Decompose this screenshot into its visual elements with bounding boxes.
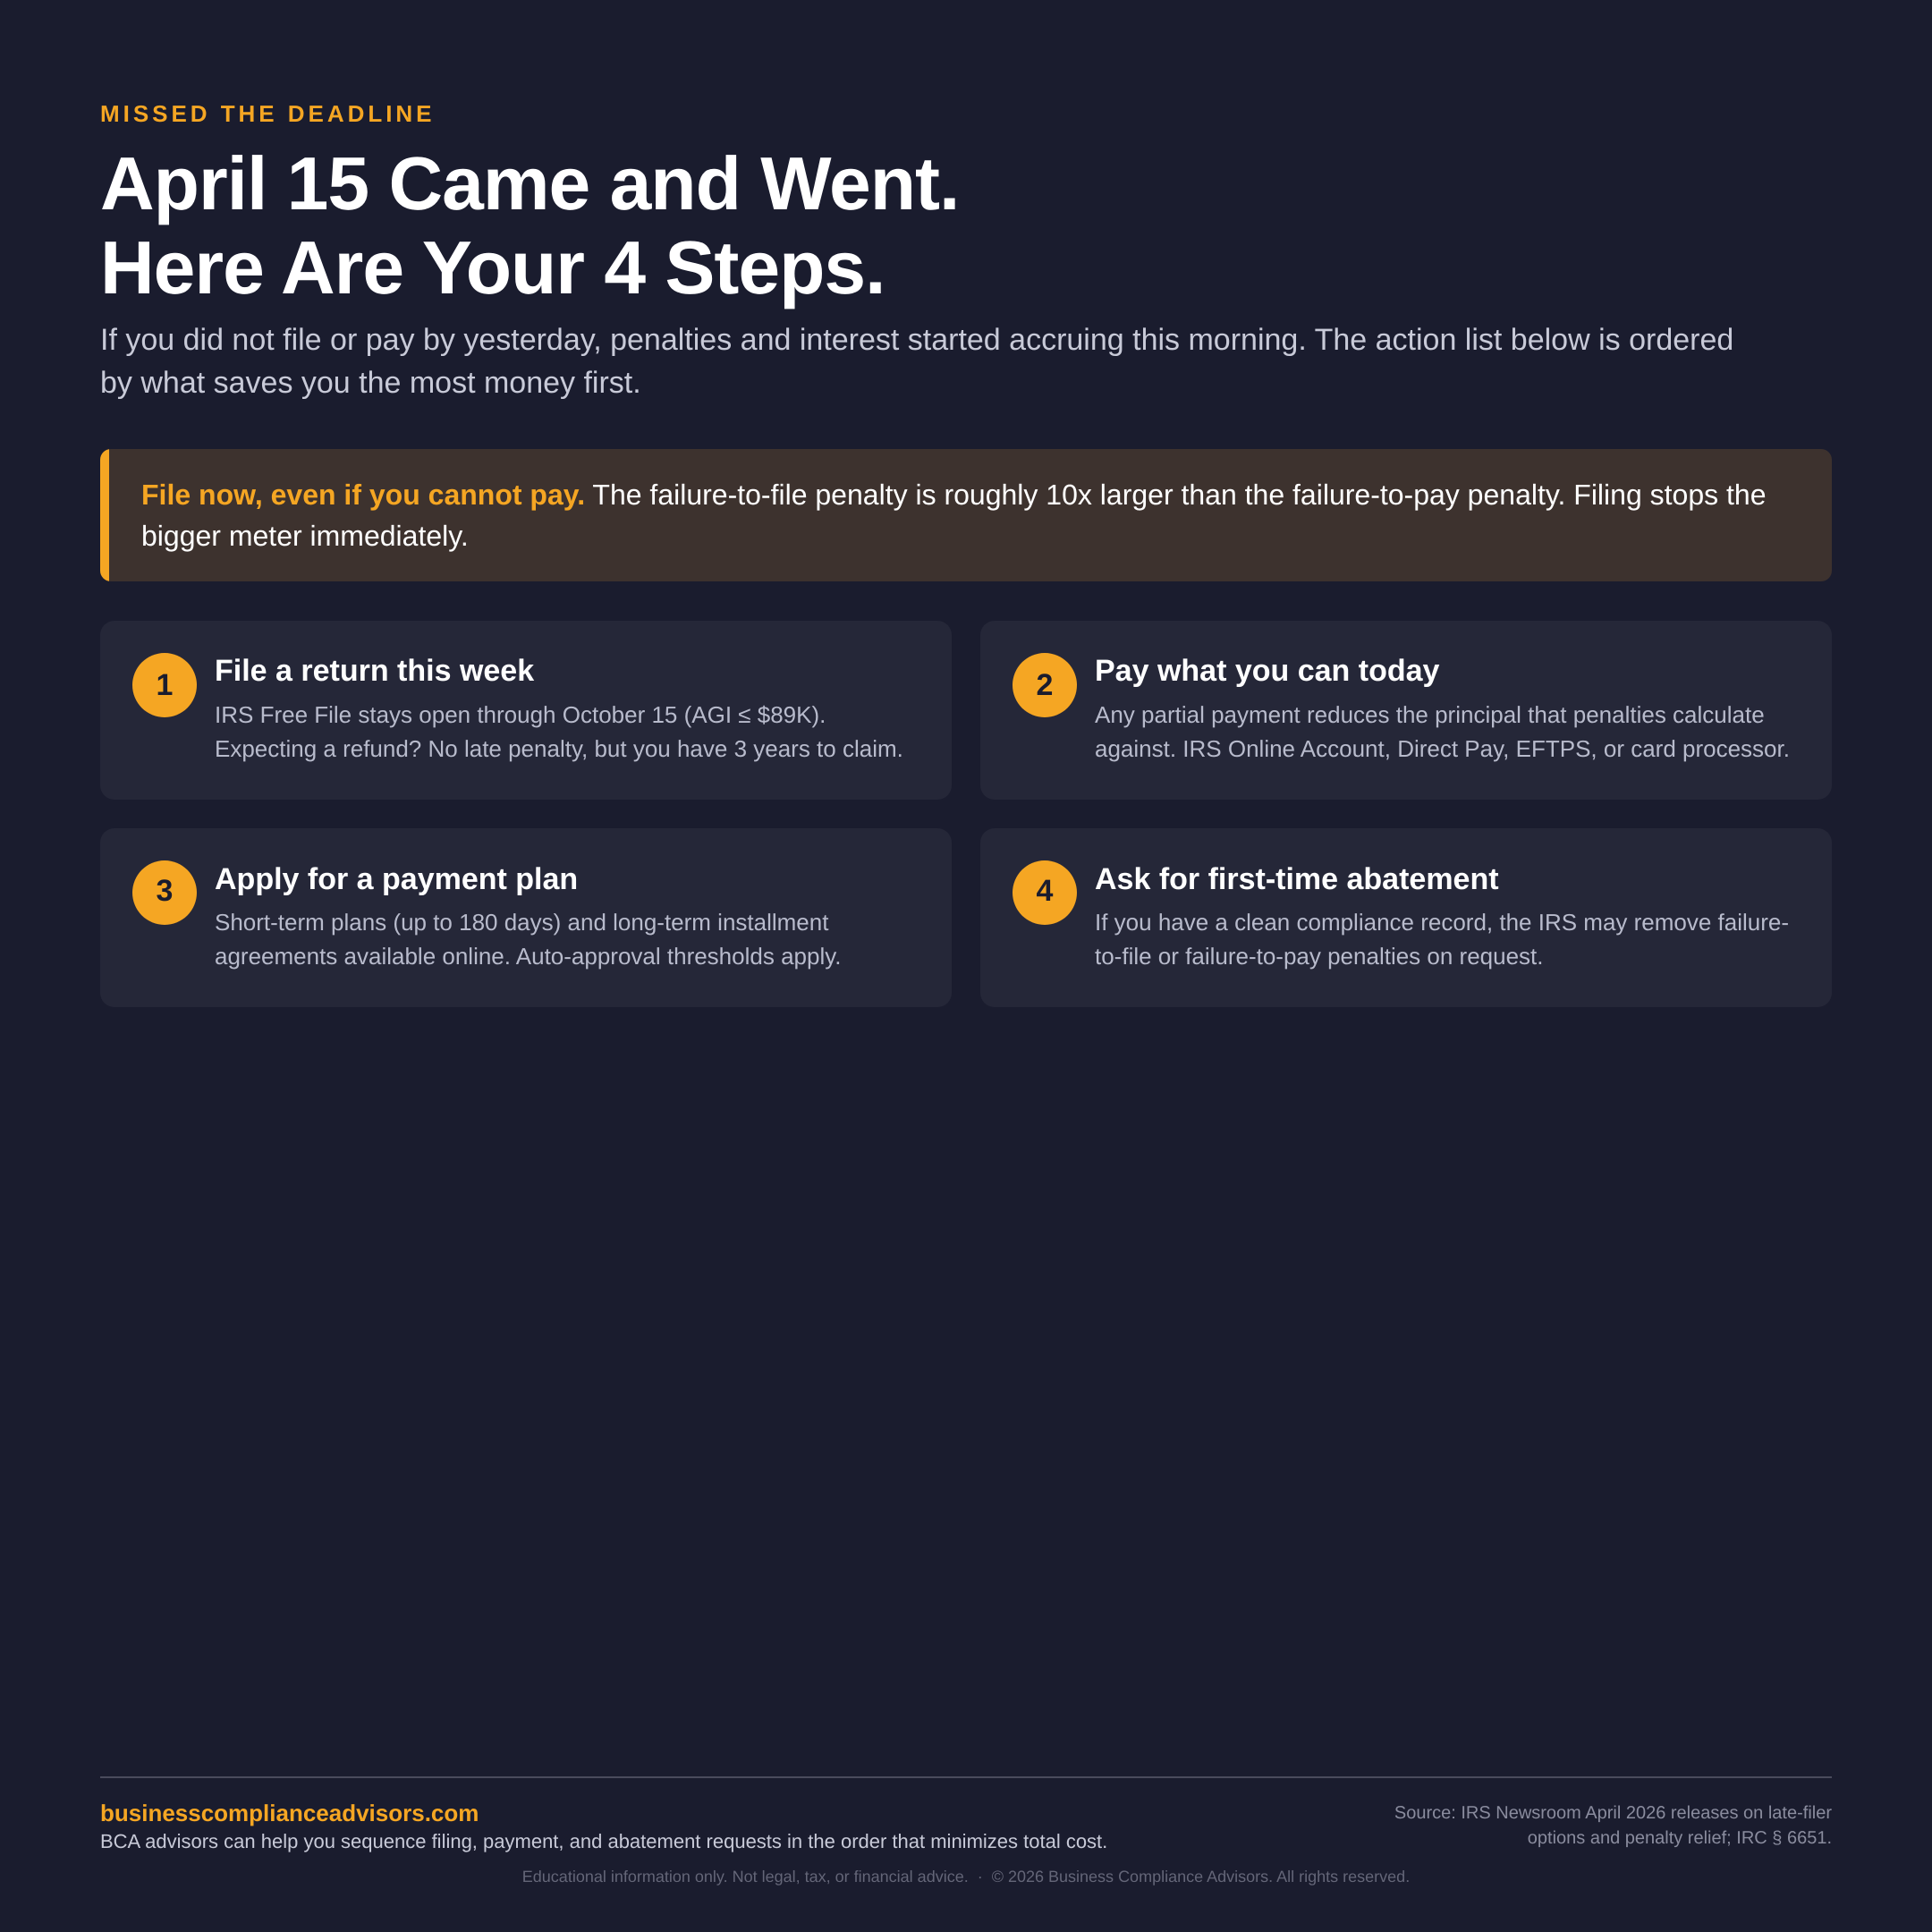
step card 4 — [980, 828, 1832, 1007]
step number 2: 2 — [1037, 668, 1053, 702]
step 1 body: Expecting a refund? No late penalty, but you have 3 years to claim. — [215, 735, 903, 762]
step card 1 — [100, 621, 952, 800]
callout text: File now, even if you cannot pay. The failure-to-file penalty is roughly 10x larger than the failure-to-pay penalty. Filing stops the — [141, 479, 1766, 511]
step number 1 — [132, 653, 197, 717]
step card 3 — [100, 828, 952, 1007]
callout accent bar — [100, 449, 109, 581]
footer source — [1394, 1803, 1832, 1848]
step 2 body: Any partial payment reduces the principal that penalties calculate — [1095, 701, 1765, 728]
step 4 body: If you have a clean compliance record, the IRS may remove failure- — [1095, 909, 1789, 936]
title: Here Are Your 4 Steps. — [100, 225, 885, 309]
step number 4: 4 — [1037, 874, 1053, 908]
eyebrow: MISSED THE DEADLINE — [100, 100, 435, 127]
footer tagline: BCA advisors can help you sequence filing, payment, and abatement requests in the order that minimizes total cost. — [100, 1830, 1107, 1852]
footer source: Source: IRS Newsroom April 2026 releases on late-filer — [1394, 1803, 1832, 1823]
step number 1: 1 — [157, 668, 173, 702]
step number 2 — [1013, 653, 1077, 717]
step 1 body — [215, 701, 903, 762]
subtitle: by what saves you the most money first. — [100, 366, 641, 400]
step number 3: 3 — [157, 874, 173, 908]
step 1 heading: File a return this week — [215, 654, 534, 688]
callout text: bigger meter immediately. — [141, 520, 469, 552]
step 3 body — [215, 909, 842, 970]
step 3 body: Short-term plans (up to 180 days) and long-term installment — [215, 909, 828, 936]
subtitle — [100, 323, 1733, 400]
title — [100, 141, 959, 309]
step 3 heading: Apply for a payment plan — [215, 862, 578, 896]
footer source: options and penalty relief; IRC § 6651. — [1528, 1828, 1832, 1848]
step card 2 — [980, 621, 1832, 800]
callout text — [141, 479, 1766, 552]
footer disclaimer: Educational information only. Not legal, tax, or financial advice. · © 2026 Business Compliance Advisors. All rights reserved. — [522, 1868, 1410, 1885]
step 4 body — [1095, 909, 1789, 970]
title: April 15 Came and Went. — [100, 141, 959, 225]
step 2 heading: Pay what you can today — [1095, 654, 1439, 688]
step 3 body: agreements available online. Auto-approval thresholds apply. — [215, 943, 842, 970]
step 2 body: against. IRS Online Account, Direct Pay, EFTPS, or card processor. — [1095, 735, 1790, 762]
step number 3 — [132, 860, 197, 925]
step 4 heading: Ask for first-time abatement — [1095, 862, 1499, 896]
step 1 body: IRS Free File stays open through October 15 (AGI ≤ $89K). — [215, 701, 826, 728]
step number 4 — [1013, 860, 1077, 925]
footer website: businesscomplianceadvisors.com — [100, 1800, 479, 1826]
step 2 body — [1095, 701, 1790, 762]
callout — [100, 449, 1832, 581]
step 4 body: to-file or failure-to-pay penalties on request. — [1095, 943, 1544, 970]
subtitle: If you did not file or pay by yesterday, penalties and interest started accruing this morning. The action list below is ordered — [100, 323, 1733, 357]
